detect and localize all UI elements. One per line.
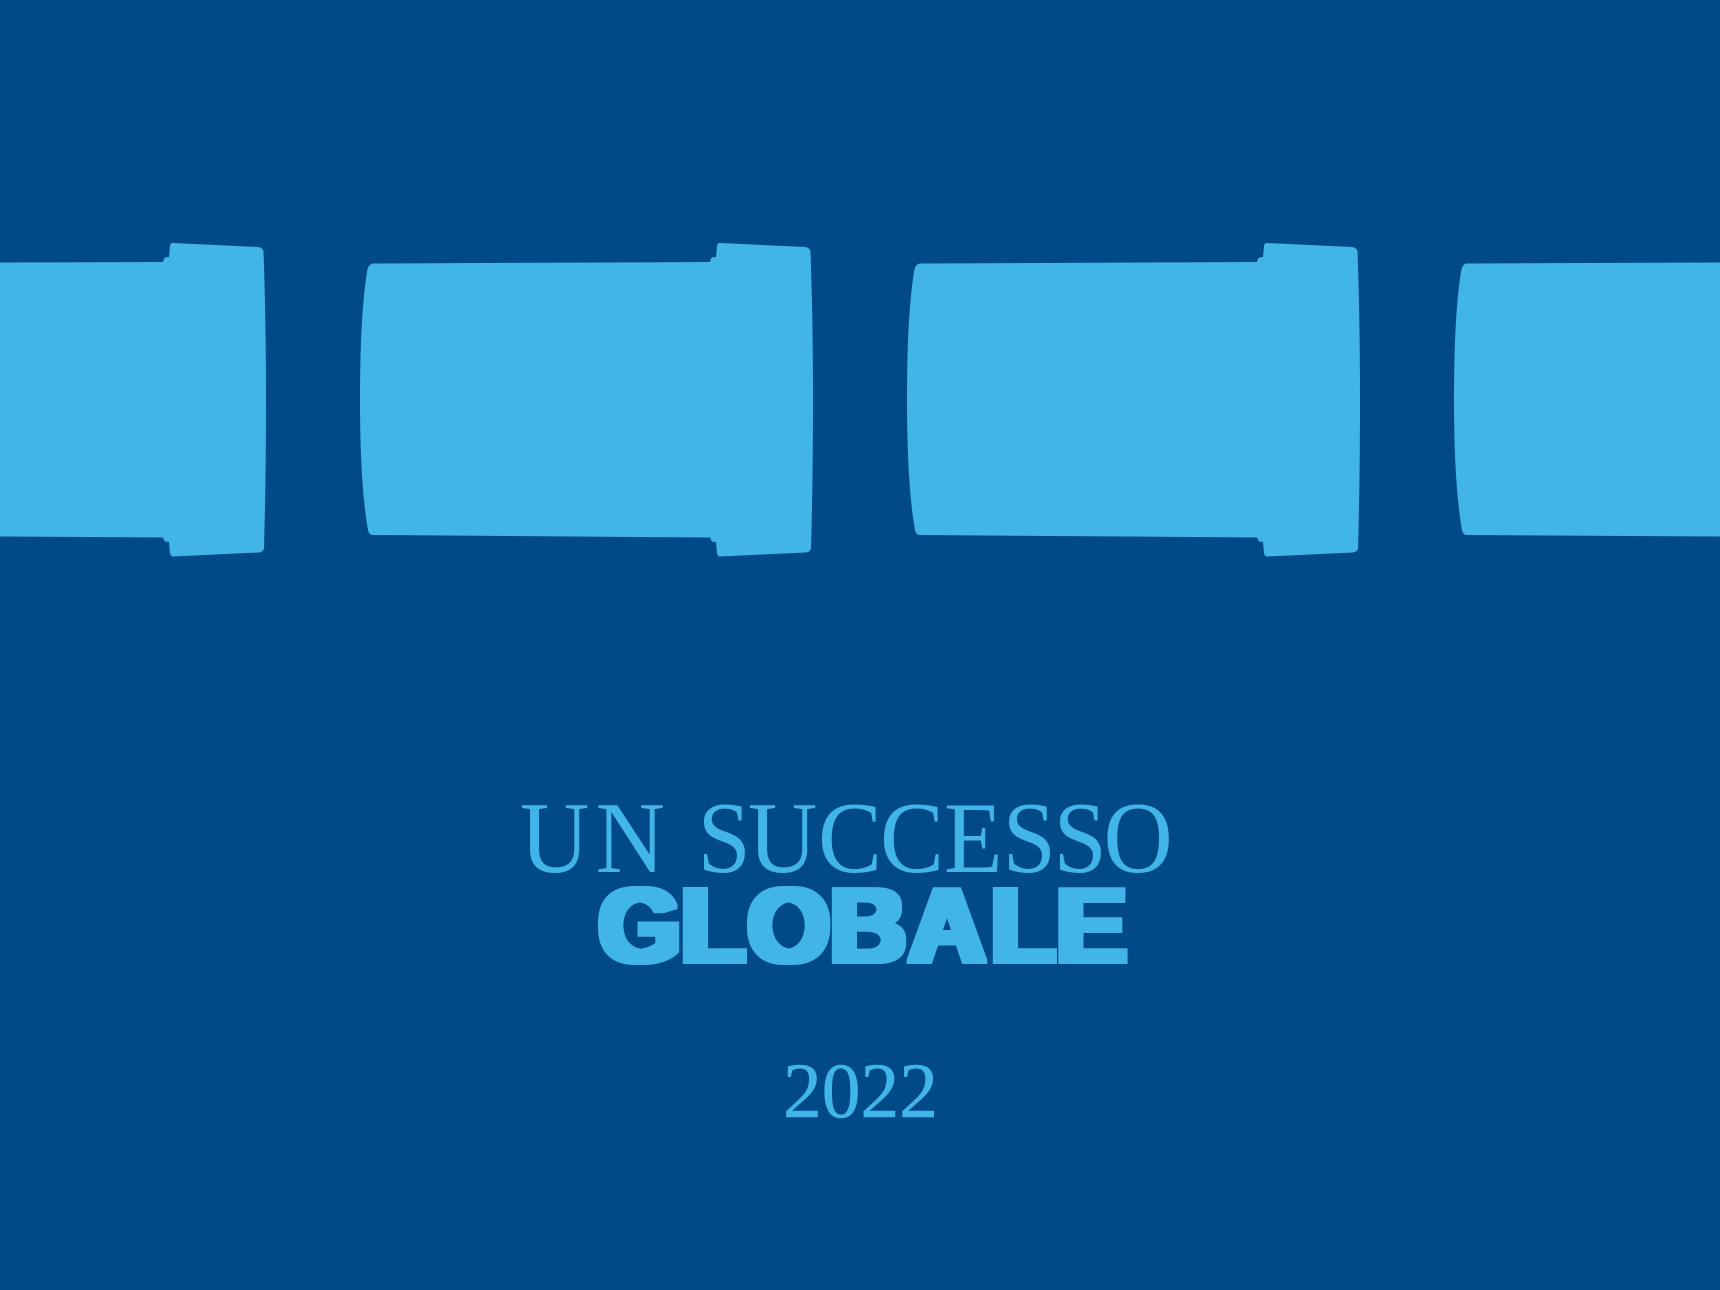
pipe segment: third xyxy=(907,243,1360,556)
year: 2022 xyxy=(783,1047,938,1134)
pipe segment: left, cropped xyxy=(0,243,266,556)
pipe segment: second xyxy=(360,243,813,556)
title line: GLOBALE: GLOBALE xyxy=(599,867,1127,985)
band of four pipe segments xyxy=(0,243,1720,556)
title line: UN SUCCESSO: UN SUCCESSO xyxy=(520,782,1173,895)
pipe segment: right, cropped xyxy=(1454,262,1720,536)
